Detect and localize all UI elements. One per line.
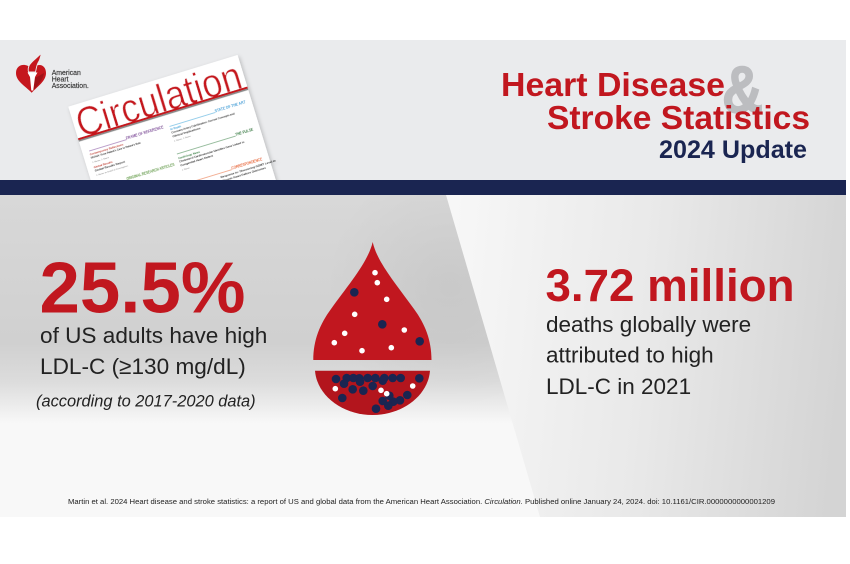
journal cover: Circulation: Response to: Discussing GDMT Level in: [220, 158, 276, 179]
journal cover: Circulation: Global Results Report: [94, 160, 126, 173]
journal cover: Circulation: ORIGINAL RESEARCH ARTICLES: [126, 162, 175, 181]
logo wordmark: American: [52, 70, 81, 77]
journal cover: Circulation: J. Name, J. Name: [174, 135, 192, 143]
title line 3: 2024 Update: [659, 136, 807, 164]
right description: deaths globally were: [546, 312, 751, 337]
journal cover: Circulation: J. Name: [182, 167, 191, 172]
lower right panel: [446, 195, 846, 517]
lower left panel: [0, 195, 846, 517]
journal cover: Circulation: Clinical Implications: [172, 126, 201, 138]
heart: [16, 65, 46, 93]
title line 1: Heart Disease: [501, 67, 725, 104]
title ampersand: &: [722, 52, 763, 126]
navy particles: [332, 288, 424, 413]
right statistic: 3.72 million: [546, 260, 794, 311]
flame: [28, 53, 42, 72]
journal cover: Circulation: Global Results: [93, 160, 113, 169]
journal cover: Circulation: Cholesterol Cardiovascular Identifies Gene Linked to: [179, 140, 245, 164]
journal cover: Circulation: STATE OF THE ART: [214, 99, 246, 113]
journal cover: Circulation: CORRESPONDENCE: [231, 156, 263, 171]
logo wordmark: Heart: [52, 76, 69, 84]
header panel: [0, 40, 846, 180]
upper drop: [313, 242, 432, 360]
citation footnote: Martin et al. 2024 Heart disease and stroke statistics: a report of US and global data from the American Heart Association. Circulation. Published online January 24, 2024. doi: 10.1161/CIR.0000000000001209: [68, 497, 775, 506]
journal cover: Circulation: Cardiology News: [178, 150, 201, 160]
left description: of US adults have high: [40, 323, 267, 348]
blood drop illustration: [313, 242, 432, 415]
journal cover: Circulation: J. Name, J. Name: [92, 157, 110, 164]
journal cover: Circulation: In Depth: [170, 124, 182, 131]
navy band: [0, 180, 846, 195]
journal cover: Circulation: HCAHA: From Patient's Care to Patient's Role: [90, 141, 141, 160]
white particles: [332, 270, 416, 397]
journal cover: Circulation: Trial Outcomes in Patients: [102, 178, 139, 193]
torch: [28, 72, 38, 90]
journal cover: Circulation: Congenital Heart Defect: [180, 154, 214, 167]
right description: attributed to high: [546, 342, 714, 368]
journal cover: Circulation: THE PULSE: [235, 127, 254, 137]
journal cover: Circulation: Chronic Heart Failure Outcomes: [221, 166, 267, 183]
journal cover: Circulation: FRAME OF REFERENCE: [125, 124, 164, 141]
journal cover: Circulation: Contemporary Reflections: [89, 142, 124, 156]
journal cover: Circulation: Coronary Artery Calcification: Current Concepts and: [171, 111, 235, 135]
logo wordmark: Association.: [52, 83, 89, 90]
lower drop: [315, 371, 430, 415]
heart shading: [34, 73, 44, 90]
title line 2: Stroke Statistics: [547, 100, 810, 137]
journal cover: Circulation: [68, 55, 279, 180]
right description: LDL-C in 2021: [546, 374, 691, 399]
journal title: Circulation: [71, 54, 247, 146]
journal cover: Circulation: J. Name on behalf of Investigators: [96, 164, 129, 177]
left note: (according to 2017-2020 data): [36, 392, 256, 410]
logo: American Heart Association heart and torch: [16, 53, 89, 93]
left statistic: 25.5%: [40, 249, 246, 329]
left description: LDL-C (≥130 mg/dL): [40, 354, 246, 379]
